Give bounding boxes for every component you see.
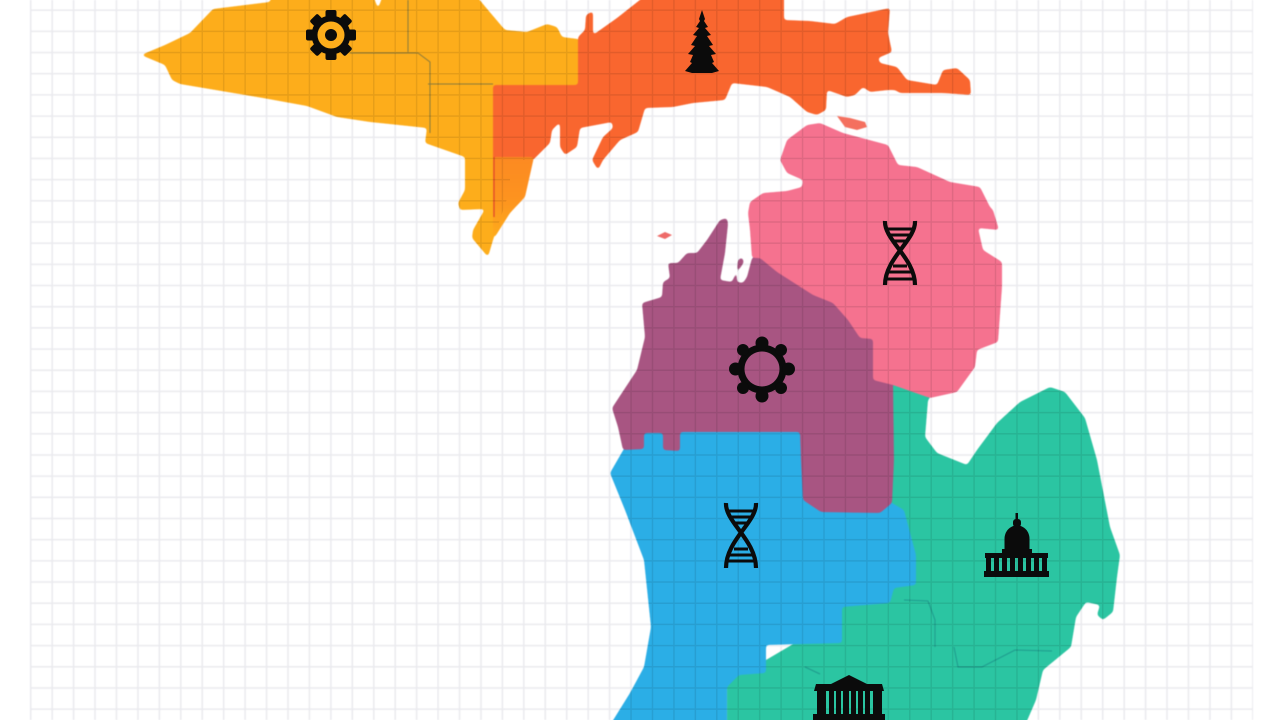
region: upper peninsula southern strip (orange)	[493, 157, 534, 240]
icon: classical columned building	[813, 675, 885, 720]
island: northwest lake	[657, 232, 672, 239]
region: southwest lower peninsula (blue)	[607, 425, 916, 720]
region: southeast lower peninsula (green)	[727, 380, 1120, 720]
icon: DNA helix on blue region	[726, 503, 756, 568]
region: northwest lower peninsula (plum)	[612, 218, 900, 513]
map: state regions	[141, 0, 1120, 720]
icon: gear outline on plum region	[729, 336, 795, 402]
county boundary lines	[350, 0, 1052, 674]
icon: pine tree	[685, 10, 719, 73]
region: eastern upper peninsula (red-orange)	[493, 0, 971, 170]
icon: gear on amber region	[306, 10, 356, 60]
region: northeast lower peninsula (pink)	[748, 123, 1002, 398]
icon: capitol dome building	[984, 513, 1049, 577]
island: north channel	[837, 116, 867, 130]
icon: DNA helix on pink region	[885, 221, 915, 285]
region: western upper peninsula (amber)	[141, 0, 590, 257]
